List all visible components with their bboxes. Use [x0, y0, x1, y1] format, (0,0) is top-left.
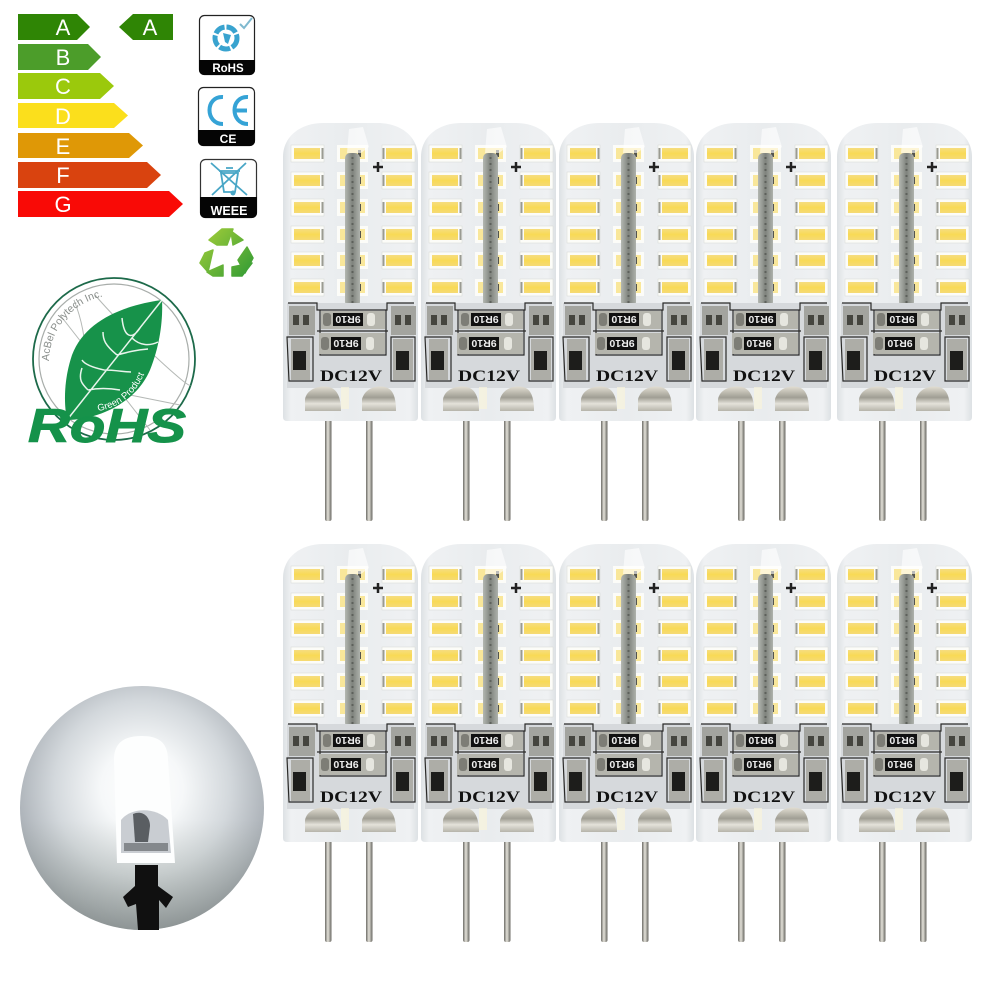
lamp bulb 10: 9R10	[889, 734, 915, 746]
lamp bulb 10	[837, 544, 972, 942]
lamp bulb 3	[559, 123, 694, 521]
lamp bulb 6: 9R10	[333, 758, 359, 770]
lamp bulb 10: DC12V	[874, 789, 937, 806]
RoHS green product logo	[28, 277, 196, 452]
icon: recycle arrows	[200, 229, 253, 276]
icon: WEEE badge	[200, 160, 257, 218]
lamp bulb 8: 9R10	[609, 758, 635, 770]
lamp bulb 1: 9R10	[333, 337, 359, 349]
lamp bulb 8: DC12V	[596, 789, 659, 806]
lit lamp photo	[20, 686, 264, 930]
icon: CE badge: CE	[220, 132, 236, 146]
lamp bulb 1: DC12V	[320, 368, 383, 385]
energy bar B	[18, 44, 101, 70]
lamp bulb 10: 9R10	[887, 758, 913, 770]
lamp bulb 8: 9R10	[611, 734, 637, 746]
lamp bulb 2: 9R10	[471, 337, 497, 349]
energy bar B: B	[56, 45, 70, 70]
energy bar C: C	[55, 74, 71, 99]
lamp bulb 5: 9R10	[887, 337, 913, 349]
energy bar A	[18, 14, 90, 40]
lamp bulb 9	[696, 544, 831, 942]
energy bar A: A	[56, 15, 71, 40]
lamp bulb 1	[283, 123, 418, 521]
energy rating scale	[18, 14, 183, 217]
lamp bulb 2	[421, 123, 556, 521]
energy bar D	[18, 103, 128, 129]
energy bar G	[18, 191, 183, 217]
lamp bulb 5: DC12V	[874, 368, 937, 385]
lamp bulb 7: DC12V	[458, 789, 521, 806]
lamp bulb 7	[421, 544, 556, 942]
icon: RoHS badge	[199, 16, 255, 75]
leaf	[65, 300, 162, 420]
energy bar C	[18, 73, 114, 99]
lit bulb	[114, 736, 175, 863]
lamp bulb 2: 9R10	[473, 313, 499, 325]
lamp bulb 6: 9R10	[335, 734, 361, 746]
energy bar D: D	[55, 104, 71, 129]
lamp bulb 9: 9R10	[746, 758, 772, 770]
lamp bulb 9: 9R10	[748, 734, 774, 746]
arc text: company name: AcBel Polytech Inc.	[42, 292, 102, 361]
lamp bulb 4: 9R10	[748, 313, 774, 325]
lamp bulb 6: DC12V	[320, 789, 383, 806]
lamp bulb 7: 9R10	[471, 758, 497, 770]
energy bar F: F	[56, 163, 70, 188]
energy bar F	[18, 162, 161, 188]
lamp bulb 3: 9R10	[611, 313, 637, 325]
lamp bulb 3: DC12V	[596, 368, 659, 385]
energy bar E	[18, 133, 143, 159]
RoHS wordmark: RoHS	[28, 399, 186, 452]
lamp bulb 4: DC12V	[733, 368, 796, 385]
lamp bulb 3: 9R10	[609, 337, 635, 349]
lamp bulb 5: 9R10	[889, 313, 915, 325]
arc text: green product: Green Product	[98, 372, 144, 410]
lamp bulb 1: 9R10	[335, 313, 361, 325]
lamp bulb 4: 9R10	[746, 337, 772, 349]
lamp bulb 4	[696, 123, 831, 521]
energy bar G: G	[54, 192, 72, 217]
energy bar E: E	[56, 134, 70, 159]
icon: RoHS badge: RoHS	[212, 63, 244, 75]
lamp bulb 9: DC12V	[733, 789, 796, 806]
lamp bulb 8	[559, 544, 694, 942]
lamp bulb 7: 9R10	[473, 734, 499, 746]
icon: CE badge	[198, 88, 255, 146]
lamp bulb 2: DC12V	[458, 368, 521, 385]
lamp bulb 5	[837, 123, 972, 521]
lamp bulb 6	[283, 544, 418, 942]
lamp holder	[123, 865, 173, 930]
rating pointer A	[119, 14, 173, 40]
icon: WEEE badge: WEEE	[211, 204, 247, 218]
rating pointer A: A	[143, 15, 158, 40]
